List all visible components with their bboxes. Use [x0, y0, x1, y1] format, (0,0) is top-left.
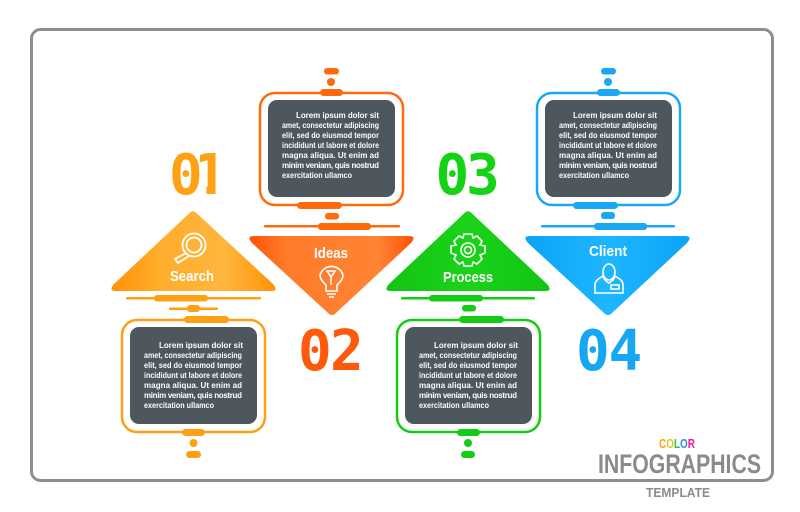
text block: Lorem ipsum dolor sit — [573, 111, 657, 120]
text block: amet, consectetur adipiscing — [144, 351, 242, 360]
step 2: connector lines — [264, 213, 400, 230]
panel: step 4 text box — [537, 68, 680, 209]
text block: magna aliqua. Ut enim ad — [282, 151, 379, 160]
text block: elit, sed do eiusmod tempor — [282, 131, 379, 140]
step 1: number: 0 — [169, 143, 203, 208]
text block: elit, sed do eiusmod tempor — [419, 361, 517, 370]
text block — [419, 341, 518, 410]
step 3: connector lines — [401, 295, 535, 312]
icon: person — [595, 264, 623, 293]
text block: exercitation ullamco — [282, 171, 352, 180]
text block: exercitation ullamco — [419, 401, 489, 410]
text block: minim veniam, quis nostrud — [419, 391, 517, 400]
label: Search: Search — [170, 268, 214, 285]
text block: magna aliqua. Ut enim ad — [559, 151, 657, 160]
step 4: connector lines — [541, 212, 675, 230]
text block: amet, consectetur adipiscing — [559, 121, 657, 130]
panel: step 2 text box — [260, 68, 403, 209]
step 1: number — [172, 152, 216, 195]
icon: gear — [451, 234, 485, 266]
label: Ideas: Ideas — [314, 245, 348, 262]
text block: incididunt ut labore et dolore — [419, 371, 517, 380]
icon: magnifying glass — [175, 234, 206, 263]
icon: light bulb — [320, 266, 343, 297]
text block: amet, consectetur adipiscing — [282, 121, 379, 130]
step 4: number: 04 — [576, 319, 642, 384]
step 2: number: 02 — [298, 319, 364, 384]
COLOR wordmark: COLOR — [659, 437, 695, 451]
text block — [282, 111, 379, 180]
text block: exercitation ullamco — [144, 401, 214, 410]
step 1: connector lines — [126, 295, 261, 312]
TEMPLATE wordmark: TEMPLATE — [646, 486, 710, 500]
text block: incididunt ut labore et dolore — [144, 371, 242, 380]
text block: Lorem ipsum dolor sit — [159, 341, 243, 350]
text block: elit, sed do eiusmod tempor — [559, 131, 657, 140]
text block: Lorem ipsum dolor sit — [296, 111, 379, 120]
step 1: triangle with icon and label — [111, 211, 276, 291]
step 2: triangle with icon and label — [249, 236, 414, 315]
text block: Lorem ipsum dolor sit — [434, 341, 518, 350]
text block: magna aliqua. Ut enim ad — [419, 381, 517, 390]
panel: step 3 text box — [397, 316, 540, 458]
label: Process: Process — [443, 269, 493, 286]
text block: minim veniam, quis nostrud — [144, 391, 242, 400]
text block: magna aliqua. Ut enim ad — [144, 381, 242, 390]
text block: elit, sed do eiusmod tempor — [144, 361, 242, 370]
panel: step 1 text box — [122, 316, 265, 458]
text block — [559, 111, 657, 180]
text block: exercitation ullamco — [559, 171, 629, 180]
text block: amet, consectetur adipiscing — [419, 351, 517, 360]
brand title block — [598, 437, 761, 500]
step 1: number: 1 — [194, 143, 227, 208]
text block: minim veniam, quis nostrud — [282, 161, 379, 170]
text block: incididunt ut labore et dolore — [559, 141, 657, 150]
step 3: triangle with icon and label — [386, 211, 550, 291]
INFOGRAPHICS wordmark: INFOGRAPHICS — [598, 449, 761, 479]
step 4: triangle with icon and label — [525, 236, 690, 315]
text block: incididunt ut labore et dolore — [282, 141, 379, 150]
text block: minim veniam, quis nostrud — [559, 161, 657, 170]
text block — [144, 341, 243, 410]
step 3: number: 03 — [436, 143, 500, 208]
label: Client: Client — [589, 243, 627, 260]
